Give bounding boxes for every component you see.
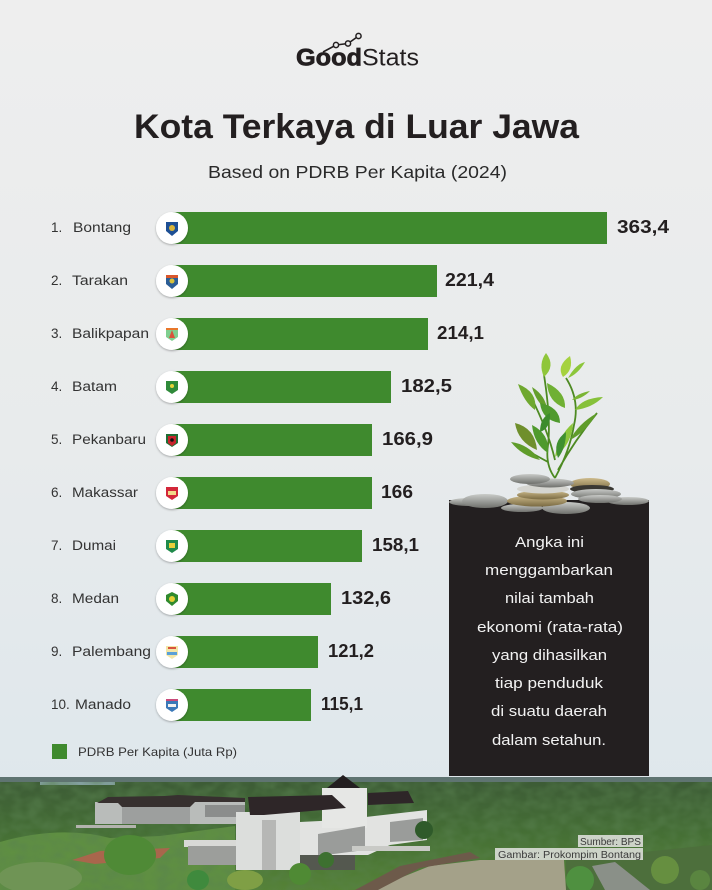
row 5: Pekanbaru (51, 424, 433, 456)
logo: GoodStats: Stats (362, 44, 419, 72)
row 3: Balikpapan: 3. (51, 326, 62, 341)
row 2: Tarakan: Tarakan (72, 273, 128, 288)
coins (449, 474, 649, 514)
illustration: plant on coins (449, 353, 649, 514)
row 1: Bontang: 1. (51, 220, 62, 235)
row 2: Tarakan (51, 265, 495, 297)
subtitle: Based on PDRB Per Kapita (2024) (208, 162, 507, 182)
row 2: Tarakan: 221,4 (445, 269, 495, 290)
logo: GoodStats: Good (296, 44, 362, 72)
row 6: Makassar: Makassar (72, 485, 139, 500)
row 3: Balikpapan: Balikpapan (72, 326, 149, 341)
row 10: Manado: Manado (75, 697, 131, 712)
photo: city hall aerial (0, 775, 712, 890)
bar chart (51, 212, 670, 721)
logo: GoodStats (296, 33, 419, 72)
row 1: Bontang (51, 212, 670, 244)
row 1: Bontang: Bontang (73, 220, 131, 235)
panel text: tiap penduduk (495, 675, 604, 692)
row 4: Batam: 182,5 (401, 375, 452, 396)
row 5: Pekanbaru: 166,9 (382, 428, 433, 449)
source credit: Gambar: Prokompim Bontang (498, 850, 641, 861)
row 9: Palembang: 9. (51, 644, 62, 659)
source credit: Sumber: BPS (580, 837, 641, 848)
red earth (72, 848, 170, 864)
panel: explanation (449, 500, 649, 776)
row 5: Pekanbaru: 5. (51, 432, 62, 447)
panel text: ekonomi (rata-rata) (477, 619, 623, 636)
source credit (495, 835, 643, 861)
second building (76, 795, 245, 828)
plant (511, 353, 603, 478)
row 8: Medan (51, 583, 391, 615)
panel text: nilai tambah (505, 590, 594, 607)
row 8: Medan: 8. (51, 591, 62, 606)
panel text: menggambarkan (485, 562, 613, 579)
row 1: Bontang: 363,4 (617, 216, 670, 237)
plaza (370, 860, 566, 890)
row 2: Tarakan: 2. (51, 273, 62, 288)
row 6: Makassar: 166 (381, 481, 413, 502)
right side road and trees (566, 845, 712, 890)
row 8: Medan: Medan (72, 591, 119, 606)
row 10: Manado: 10. (51, 697, 70, 712)
row 7: Dumai: Dumai (72, 538, 116, 553)
row 6: Makassar: 6. (51, 485, 62, 500)
panel text (477, 534, 623, 749)
row 9: Palembang: Palembang (72, 644, 151, 659)
row 7: Dumai: 7. (51, 538, 62, 553)
row 4: Batam (51, 371, 452, 403)
row 10: Manado: 115,1 (321, 693, 363, 714)
panel text: dalam setahun. (492, 732, 606, 749)
legend: PDRB Per Kapita (Juta Rp) (78, 745, 237, 759)
main building (184, 775, 433, 885)
row 4: Batam: 4. (51, 379, 62, 394)
row 8: Medan: 132,6 (341, 587, 391, 608)
row 4: Batam: Batam (72, 379, 117, 394)
row 9: Palembang: 121,2 (328, 640, 374, 661)
panel text: Angka ini (515, 534, 584, 551)
row 5: Pekanbaru: Pekanbaru (72, 432, 146, 447)
row 7: Dumai: 158,1 (372, 534, 419, 555)
row 9: Palembang (51, 636, 374, 668)
foreground trees (0, 835, 263, 890)
row 7: Dumai (51, 530, 419, 562)
panel text: yang dihasilkan (492, 647, 607, 664)
title: Kota Terkaya di Luar Jawa (134, 108, 580, 146)
row 3: Balikpapan: 214,1 (437, 322, 484, 343)
row 10: Manado (51, 689, 363, 721)
row 3: Balikpapan (51, 318, 484, 350)
panel text: di suatu daerah (491, 703, 607, 720)
row 6: Makassar (51, 477, 413, 509)
